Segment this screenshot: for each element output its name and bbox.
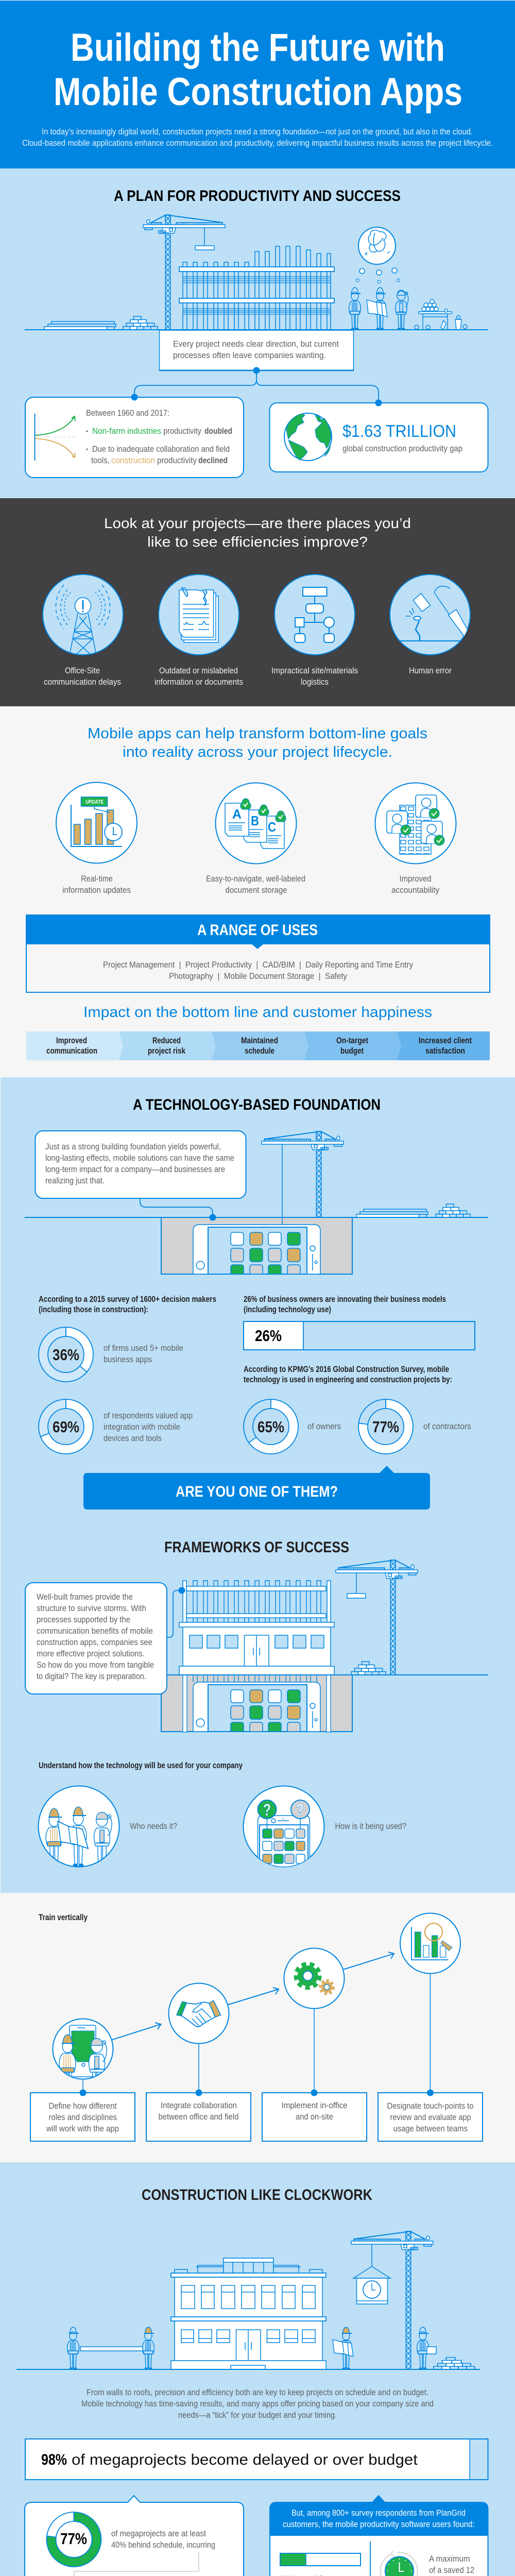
label: information or documents — [154, 677, 243, 687]
step box 1: will work with the app — [46, 2124, 119, 2133]
step box 1: roles and disciplines — [48, 2112, 117, 2122]
text: productivity facts — [86, 408, 232, 465]
illustration: building under construction — [179, 246, 334, 330]
illustration: building frame — [179, 1581, 334, 1675]
title — [54, 26, 462, 114]
heading: A PLAN FOR PRODUCTIVITY AND SUCCESS — [114, 188, 401, 205]
card: plangrid survey — [269, 2496, 488, 2576]
ground line — [167, 1674, 488, 1675]
icon: phone and workers — [53, 2019, 113, 2079]
illustration: finished building — [171, 2258, 326, 2369]
icon: phone with questions — [243, 1786, 324, 1875]
bar: 98% of megaprojects: of megaprojects become delayed or over budget — [72, 2451, 418, 2468]
callout: frameworks: So how do you move from tangible — [37, 1660, 154, 1670]
label: logistics — [301, 677, 329, 687]
step box 4: review and evaluate app — [390, 2112, 471, 2122]
bar: 26% — [244, 1321, 475, 1350]
illustration: phone in foundation — [161, 1217, 352, 1274]
step box 2: Integrate collaboration — [161, 2100, 237, 2110]
icon: three workers — [38, 1786, 119, 1868]
callout: foundation: Just as a strong building foundation yields powerful, — [45, 1142, 221, 1151]
ground line — [25, 1217, 488, 1218]
illustration: crane — [262, 1131, 344, 1225]
callout: frameworks — [25, 1583, 185, 1694]
chart: productivity curves — [35, 414, 76, 461]
step box 3: Implement in-office — [281, 2100, 347, 2110]
step box 1 — [30, 2090, 135, 2141]
intro text — [22, 127, 493, 148]
text — [429, 2554, 474, 2576]
icon: gears — [284, 1948, 344, 2008]
label — [62, 874, 131, 895]
donut: 36% — [39, 1327, 93, 1382]
step box 4: Designate touch-points to — [387, 2101, 474, 2111]
callout: frameworks: processes supported by the — [37, 1615, 130, 1624]
callout: frameworks: more effective project solutions. — [37, 1649, 145, 1658]
card: plangrid survey: customers, the mobile productivity software users found: — [283, 2519, 475, 2529]
text — [104, 1411, 193, 1443]
label — [206, 874, 305, 895]
label: Real-time — [81, 874, 113, 884]
icon: labeled documents: B — [251, 813, 259, 828]
donut: 69% — [39, 1399, 93, 1454]
panel: a plan for productivity and success — [0, 168, 515, 498]
text: of respondents valued app — [104, 1411, 193, 1420]
card: productivity — [25, 394, 244, 478]
text: productivity facts: tools, — [91, 455, 110, 465]
heading: Mobile apps can help transform bottom-line goals — [88, 725, 427, 742]
callout: frameworks: structure to survive storms. With — [37, 1603, 146, 1613]
icon: real-time chart: UPDATE — [85, 799, 104, 805]
illustration: thought bubble — [356, 227, 400, 283]
illustration: lumber — [356, 1209, 428, 1217]
banner: are you one of them: ARE YOU ONE OF THEM? — [176, 1483, 338, 1500]
text: productivity facts: productivity — [163, 426, 201, 436]
label: Easy-to-navigate, well-labeled — [206, 874, 305, 884]
icon: flow chart — [274, 574, 355, 655]
text: of a saved 12 — [429, 2565, 474, 2575]
icon: labeled documents: C — [268, 819, 276, 835]
card: plangrid survey: But, among 800+ survey respondents from PlanGrid — [291, 2508, 466, 2518]
illustration: bricks — [123, 316, 158, 330]
stats heading: business owners: (including technology use) — [244, 1304, 331, 1314]
callout: foundation — [35, 1131, 246, 1221]
text: Who needs it? — [130, 1821, 177, 1831]
chevron process bar: budget — [340, 1046, 364, 1056]
icon: accountability — [375, 783, 456, 863]
label — [44, 666, 121, 687]
text block: From walls to roofs, precision and efficiency both are key to keep projects on schedule and on budget. — [87, 2387, 428, 2397]
chevron process bar: Improved — [56, 1036, 87, 1045]
icon: labeled documents — [215, 783, 297, 863]
step box 4: usage between teams — [393, 2124, 468, 2133]
chevron process bar: Reduced — [152, 1036, 181, 1045]
card: productivity gap — [270, 400, 488, 472]
illustration: worker with plans — [333, 2327, 353, 2369]
donut: 65%: 65% — [258, 1418, 284, 1436]
stats heading: KPMG: According to KPMG’s 2016 Global Construction Survey, mobile — [244, 1364, 449, 1374]
text: devices and tools — [104, 1433, 162, 1443]
illustration: lumber — [44, 321, 116, 330]
callout: foundation: long-term impact for a company—and businesses are — [45, 1164, 225, 1174]
chevron process bar — [26, 1031, 490, 1060]
list of uses: Photography | Mobile Document Storage | Safety — [169, 971, 347, 981]
callout: foundation: long-lasting effects, mobile solutions can have the same — [45, 1153, 234, 1163]
connector — [131, 367, 382, 406]
ground line — [25, 329, 488, 330]
illustration: worker with box — [417, 2327, 436, 2369]
header panel — [0, 1, 515, 168]
heading: CONSTRUCTION LIKE CLOCKWORK — [142, 2187, 372, 2204]
connector — [74, 2552, 199, 2576]
stats heading: 2015 survey — [39, 1294, 216, 1314]
bar: 98% of megaprojects: 98% — [41, 2451, 67, 2468]
label: Outdated or mislabeled — [159, 666, 238, 675]
text block — [81, 2387, 434, 2420]
text: of firms used 5+ mobile — [104, 1343, 183, 1353]
callout: foundation: realizing just that. — [45, 1176, 105, 1185]
stats heading: KPMG — [244, 1364, 452, 1384]
stats heading: KPMG: technology is used in engineering and construction projects by: — [244, 1375, 452, 1384]
panel: a range of uses — [26, 915, 490, 992]
label: document storage — [226, 885, 287, 895]
donut: 65% — [244, 1399, 298, 1454]
panel: mobile app benefits — [26, 725, 490, 1060]
illustration: crane — [143, 215, 225, 330]
label: accountability — [391, 885, 439, 895]
heading: into reality across your project lifecycle. — [123, 744, 392, 760]
chevron process bar: On-target — [336, 1036, 368, 1045]
donut: 69%: 69% — [53, 1418, 79, 1436]
illustration: frame columns below ground — [183, 1675, 331, 1732]
heading: FRAMEWORKS OF SUCCESS — [164, 1539, 349, 1556]
chevron process bar: project risk — [148, 1046, 185, 1056]
card: productivity gap: $1.63 TRILLION — [342, 421, 456, 440]
text: productivity facts: declined — [198, 455, 228, 465]
chevron process bar: schedule — [245, 1046, 274, 1056]
card: 77% megaprojects — [25, 2496, 244, 2576]
heading — [88, 725, 427, 760]
bar: 26%: 26% — [255, 1327, 282, 1345]
callout: frameworks: to digital? The key is preparation. — [37, 1671, 146, 1681]
label — [271, 666, 358, 687]
label — [391, 874, 439, 895]
panel: look at your projects — [0, 498, 515, 706]
text: productivity facts: Non-farm industries — [92, 426, 161, 436]
icon: damaged documents — [159, 574, 239, 655]
step box 4 — [378, 2090, 483, 2141]
text: productivity facts: doubled — [204, 426, 232, 436]
text: 40% behind schedule, incurring — [111, 2540, 215, 2550]
heading: Look at your projects—are there places you’d — [104, 515, 411, 531]
subheading: Understand how the technology will be used for your company — [39, 1760, 243, 1770]
card: productivity gap: global construction productivity gap — [342, 444, 462, 453]
callout: frameworks: communication benefits of mobile — [37, 1626, 153, 1636]
label — [154, 666, 243, 687]
icon: clock — [381, 2551, 418, 2576]
list of uses — [103, 960, 413, 981]
heading — [104, 515, 411, 550]
text: of owners — [307, 1421, 341, 1431]
text — [111, 2529, 215, 2550]
illustration: workers — [349, 287, 408, 330]
text: productivity facts: construction — [111, 455, 155, 465]
chevron process bar: satisfaction — [425, 1046, 465, 1056]
heading: like to see efficiencies improve? — [147, 534, 368, 550]
title: Building the Future with — [71, 26, 445, 70]
illustration: bricks — [436, 1204, 470, 1217]
chevron process bar: communication — [46, 1046, 97, 1056]
icon: welding torch — [390, 574, 471, 655]
text — [281, 2574, 359, 2576]
stats heading: business owners — [244, 1294, 446, 1314]
illustration: crane — [336, 1560, 418, 1675]
chevron process bar: Maintained — [241, 1036, 278, 1045]
step box 3: and on-site — [296, 2112, 333, 2122]
list of uses: Project Management | Project Productivity | CAD/BIM | Daily Reporting and Time Entry — [103, 960, 413, 970]
stats heading: 2015 survey: According to a 2015 survey of 1600+ decision makers — [39, 1294, 216, 1304]
panel: train vertically — [30, 1912, 483, 2142]
callout: project direction: processes often leave companies wanting. — [173, 350, 326, 360]
icon: handshake — [169, 1984, 229, 2043]
donut: 77%: 77% — [60, 2530, 87, 2548]
chevron process bar: Increased client — [419, 1036, 472, 1045]
bar: 32% — [280, 2553, 360, 2566]
panel: construction like clockwork — [0, 2162, 515, 2576]
illustration: workers carrying beam — [67, 2327, 154, 2369]
text: of contractors — [423, 1421, 471, 1431]
panel: a range of uses: A RANGE OF USES — [197, 922, 318, 939]
ground line — [16, 2369, 480, 2370]
text — [104, 1343, 183, 1364]
step box 2 — [146, 2090, 251, 2141]
label: Human error — [409, 666, 452, 675]
step box 1: Define how different — [48, 2101, 117, 2111]
text block: Mobile technology has time-saving results, and many apps offer pricing based on your company size and — [81, 2399, 434, 2409]
callout: project direction — [159, 330, 354, 370]
label: Improved — [400, 874, 432, 884]
icon: phone with questions: ? — [263, 1801, 271, 1819]
label: information updates — [62, 885, 131, 895]
icon: chart with magnifier — [400, 1913, 460, 1973]
step box 3 — [262, 2090, 367, 2141]
donut: 77%: 77% — [372, 1418, 399, 1436]
step box 2: between office and field — [159, 2112, 239, 2122]
icon: real-time chart — [56, 782, 137, 863]
donut: 36%: 36% — [53, 1346, 79, 1364]
text: of megaprojects are at least — [111, 2529, 206, 2538]
label: Impractical site/materials — [271, 666, 358, 675]
donut: 77% — [358, 1399, 413, 1454]
callout: frameworks: Well-built frames provide the — [37, 1592, 133, 1602]
text: productivity facts: Between 1960 and 2017: — [86, 408, 169, 418]
text: How is it being used? — [335, 1821, 406, 1831]
label: communication delays — [44, 677, 121, 687]
text: integration with mobile — [104, 1422, 180, 1432]
text block: needs—a “tick” for your budget and your timing. — [178, 2410, 337, 2420]
illustration: bricks — [434, 2358, 475, 2369]
illustration: table with materials — [415, 299, 467, 330]
callout: project direction: Every project needs clear direction, but current — [173, 339, 339, 349]
icon: phone with questions: ? — [296, 1801, 304, 1819]
callout: frameworks: construction apps, companies see — [37, 1637, 152, 1647]
donut: 77% — [46, 2512, 101, 2567]
text: A maximum — [429, 2554, 470, 2564]
illustration: phone in foundation — [161, 1675, 352, 1732]
heading: A TECHNOLOGY-BASED FOUNDATION — [133, 1096, 381, 1113]
text: productivity facts: Due to inadequate collaboration and field — [92, 444, 230, 454]
label: Office-Site — [65, 666, 100, 675]
icon: signal tower — [43, 574, 123, 655]
subheading: Train vertically — [39, 1912, 88, 1922]
icon: globe — [284, 413, 332, 461]
heading: Impact on the bottom line and customer happiness — [83, 1004, 432, 1021]
panel: a technology-based foundation — [1, 1077, 515, 1893]
bar: 98% of megaprojects — [25, 2439, 488, 2480]
text: productivity facts: productivity — [157, 455, 197, 465]
stats heading: business owners: 26% of business owners are innovating their business models — [244, 1294, 446, 1304]
banner: are you one of them — [83, 1466, 430, 1510]
arrows — [112, 1952, 394, 2040]
connector lines — [83, 1974, 431, 2093]
illustration: bricks — [351, 1662, 386, 1675]
stats heading: 2015 survey: (including those in construction): — [39, 1304, 148, 1314]
icon: labeled documents: A — [232, 806, 242, 822]
text: business apps — [104, 1354, 152, 1364]
illustration: crane with clock tower — [351, 2231, 433, 2369]
